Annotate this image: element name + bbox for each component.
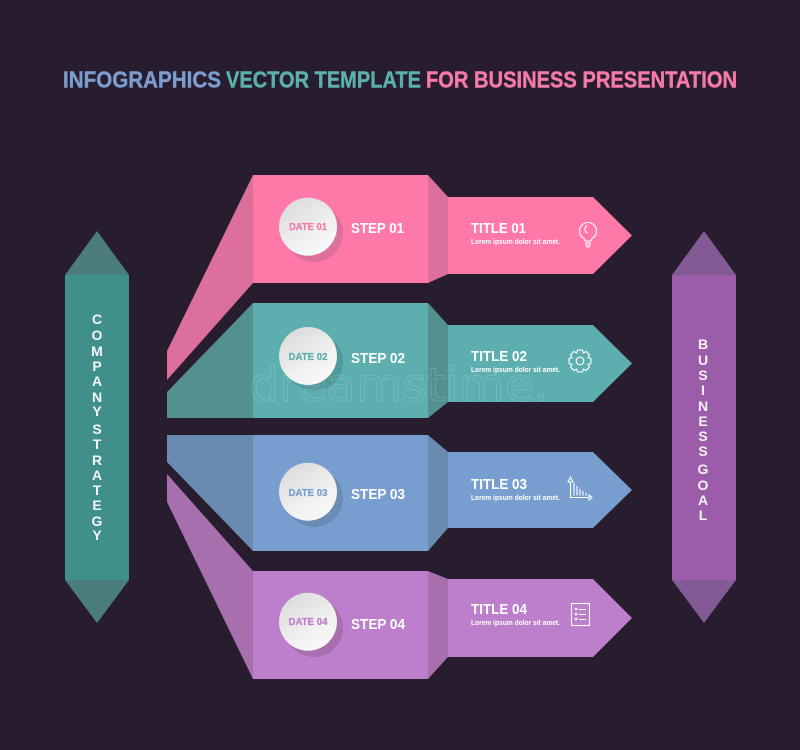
label: business goal: A (698, 492, 708, 508)
icon: light bulb (580, 223, 596, 247)
label: company strategy: T (93, 482, 102, 498)
label: company strategy: N (92, 389, 102, 405)
title: VECTOR TEMPLATE (226, 66, 421, 92)
label: company strategy: R (92, 452, 102, 468)
title 03: TITLE 03 (471, 477, 527, 493)
label: business goal: E (698, 413, 708, 429)
icon: checklist (572, 604, 590, 626)
panel: step 02 (167, 303, 632, 418)
title 02: TITLE 02 (471, 349, 527, 365)
step label 03: STEP 03 (351, 487, 405, 503)
label: business goal: S (698, 428, 708, 444)
step label 04: STEP 04 (351, 617, 405, 633)
label: business goal: S (698, 367, 708, 383)
label: business goal: N (698, 398, 708, 414)
label: company strategy: M (91, 343, 103, 359)
panel: step 04 (167, 474, 632, 679)
panel: step 03 (167, 435, 632, 551)
label: company strategy: P (92, 358, 102, 374)
date badge 01: DATE 01 (289, 222, 327, 233)
date badge 03: DATE 03 (288, 488, 328, 499)
text 04: Lorem ipsum dolor sit amet. (471, 620, 560, 627)
date badge 03 (279, 463, 343, 527)
label: business goal: U (698, 352, 708, 368)
date badge 04 (279, 593, 343, 657)
date badge 02 (279, 327, 343, 391)
text 03: Lorem ipsum dolor sit amet. (471, 495, 560, 502)
date badge 01 (279, 198, 343, 262)
label: company strategy: G (92, 513, 103, 529)
icon: gear (569, 350, 591, 372)
watermark: dreamstime. (249, 358, 549, 412)
label: business goal: O (698, 477, 709, 493)
label: business goal: G (698, 461, 709, 477)
label: company strategy: Y (92, 403, 102, 419)
title: FOR BUSINESS PRESENTATION (426, 66, 737, 92)
label: company strategy: Y (92, 527, 102, 543)
label: company strategy: O (92, 327, 103, 343)
label: company strategy: A (92, 373, 102, 389)
label: company strategy: E (92, 497, 102, 513)
date badge 02: DATE 02 (288, 352, 328, 363)
date badge 04: DATE 04 (288, 617, 328, 628)
label: company strategy: S (92, 421, 102, 437)
title 04: TITLE 04 (471, 602, 527, 618)
text 02: Lorem ipsum dolor sit amet. (471, 367, 560, 374)
label: business goal (698, 336, 709, 523)
label: business goal: B (698, 336, 708, 352)
label: company strategy: T (93, 436, 102, 452)
step label 02: STEP 02 (351, 351, 405, 367)
label: company strategy: C (92, 311, 102, 327)
label: company strategy: A (92, 467, 102, 483)
label: business goal: L (699, 507, 708, 523)
panel: business goal (672, 231, 736, 623)
label: company strategy (91, 311, 103, 543)
step label 01: STEP 01 (351, 221, 404, 237)
panel: step 01 (167, 175, 632, 380)
title: INFOGRAPHICS (63, 66, 221, 92)
panel: company strategy (65, 231, 129, 623)
icon: bar chart (568, 477, 592, 500)
title (63, 66, 737, 92)
text 01: Lorem ipsum dolor sit amet. (471, 239, 560, 246)
label: business goal: I (701, 382, 705, 398)
label: business goal: S (698, 443, 708, 459)
title 01: TITLE 01 (471, 221, 526, 237)
